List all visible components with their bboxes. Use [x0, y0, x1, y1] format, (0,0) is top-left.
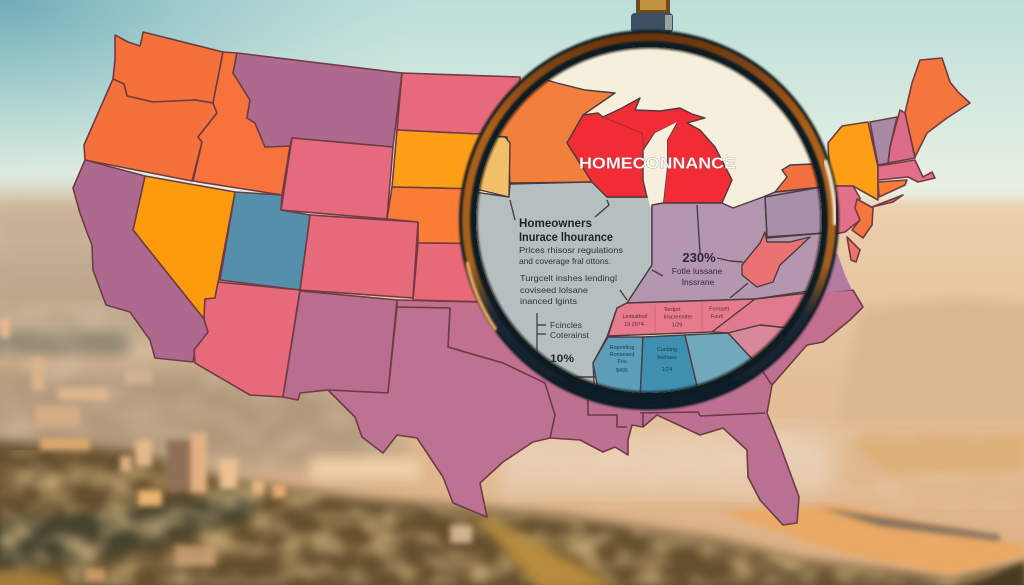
map title label: HOMECONNANCE [579, 156, 736, 172]
state: South Carolina in lens [728, 324, 785, 359]
state: California [73, 160, 208, 362]
callout: 230 percent: Fotle lussane [672, 266, 723, 276]
region: Lake Michigan [644, 122, 677, 207]
border: Wisconsin and upper peninsula [605, 118, 644, 150]
lens contents [476, 47, 822, 393]
lens rim [459, 30, 839, 410]
lens text block: details: coviseed lolsane [520, 285, 588, 295]
lens vignette [474, 45, 824, 395]
state: Nevada [133, 176, 235, 319]
state: New Mexico [283, 291, 397, 400]
state: Wyoming [281, 138, 393, 219]
state: Idaho [193, 52, 290, 195]
handle [631, 0, 673, 33]
state: Pennsylvania edge [830, 186, 860, 235]
lens mini chart with legend: 10% [550, 353, 574, 365]
callout: 230 percent: 230% [682, 250, 716, 265]
state: Connecticut [878, 180, 907, 197]
state: Pennsylvania in lens [765, 187, 826, 238]
state: Nebraska [387, 187, 520, 244]
tennessee row labels: 1/29 [672, 322, 682, 328]
state: New York [828, 122, 878, 200]
city haze mottling [0, 300, 420, 480]
lens heading: Homeowners [519, 218, 592, 230]
lens text block: prices [519, 245, 623, 266]
lens text block: details [520, 273, 617, 306]
lens heading: Inurace lhourance [519, 232, 613, 244]
state: South Dakota in lens [478, 136, 511, 196]
lens text block: prices: and coverage fral ottons. [519, 256, 611, 266]
tennessee row labels: Tordprt [663, 307, 681, 313]
state: Montana [233, 53, 402, 147]
state: Virginia edge [800, 240, 852, 295]
region: southern states [397, 290, 863, 525]
magnifying glass [459, 0, 860, 410]
state: North Carolina in lens [712, 292, 806, 333]
state: Kansas [413, 243, 520, 303]
state: New Hampshire [888, 110, 915, 163]
blue state labels: Fos [617, 359, 627, 365]
golden field [720, 505, 1024, 575]
state: Utah [220, 192, 310, 290]
state: North Dakota [397, 73, 520, 136]
state: Arizona [194, 282, 300, 397]
lens text block: details: inanced lgints [520, 296, 577, 306]
blue state labels: 1/24 [662, 367, 672, 373]
state: Washington [113, 32, 223, 103]
border lines inside lens [510, 197, 823, 377]
blue state labels [610, 345, 677, 374]
state: Mississippi [593, 337, 643, 400]
state: Maine [905, 58, 970, 157]
state: Long Island [872, 195, 903, 207]
blue state labels: Inahaes [657, 355, 677, 361]
lens heading [519, 218, 613, 244]
lens mini chart with legend: Fcincles [550, 320, 582, 330]
tennessee row labels: 19 2974 [624, 322, 644, 328]
lens mini chart with legend [537, 313, 590, 365]
state: Massachusetts [878, 160, 935, 182]
state: Texas [328, 307, 555, 517]
tennessee row labels: Fouti [711, 314, 723, 320]
forest ground [0, 440, 1024, 585]
state: Vermont [870, 117, 897, 165]
callout: 230 percent [672, 250, 723, 287]
state: Minnesota [498, 80, 616, 184]
lens text block: details: Turgcelt inshes lendingl [520, 273, 617, 283]
Tennessee dividers [655, 302, 702, 332]
tennessee row labels [622, 306, 729, 328]
state: New York in lens [775, 164, 822, 192]
lens mini chart with legend: Coterainst [550, 330, 590, 340]
tennessee row labels: Fornsetl [709, 306, 729, 312]
state: New Jersey [852, 199, 873, 238]
state: Alabama [640, 334, 696, 393]
region: Ohio valley purple states [626, 188, 822, 302]
US map [73, 32, 970, 525]
state: Wisconsin and Michigan [567, 98, 732, 203]
blue state labels: Cuntitng [657, 347, 677, 353]
state: Colorado [300, 215, 418, 298]
state: South Dakota [392, 130, 520, 190]
blue state labels: Ropeirling [610, 345, 634, 351]
blue state labels: $495 [616, 368, 628, 374]
state: Delaware and Maryland [847, 237, 860, 262]
state: Tennessee row [608, 299, 755, 336]
state: Georgia [684, 332, 752, 386]
callout: 230 percent: Inssrane [682, 277, 715, 287]
state: Oregon [84, 79, 217, 181]
region: Louisiana border lines [588, 372, 772, 427]
blurred towers and buildings [0, 318, 472, 582]
state: West Virginia [742, 232, 810, 287]
region: grey midwest state [476, 181, 652, 384]
lens text block: prices: Prlces rhisosr regulations [519, 245, 623, 255]
blue state labels: Ronsesed [610, 352, 634, 358]
tennessee row labels: Inscrenniter [664, 314, 693, 320]
tennessee row labels: Lestuldreil [622, 314, 648, 320]
